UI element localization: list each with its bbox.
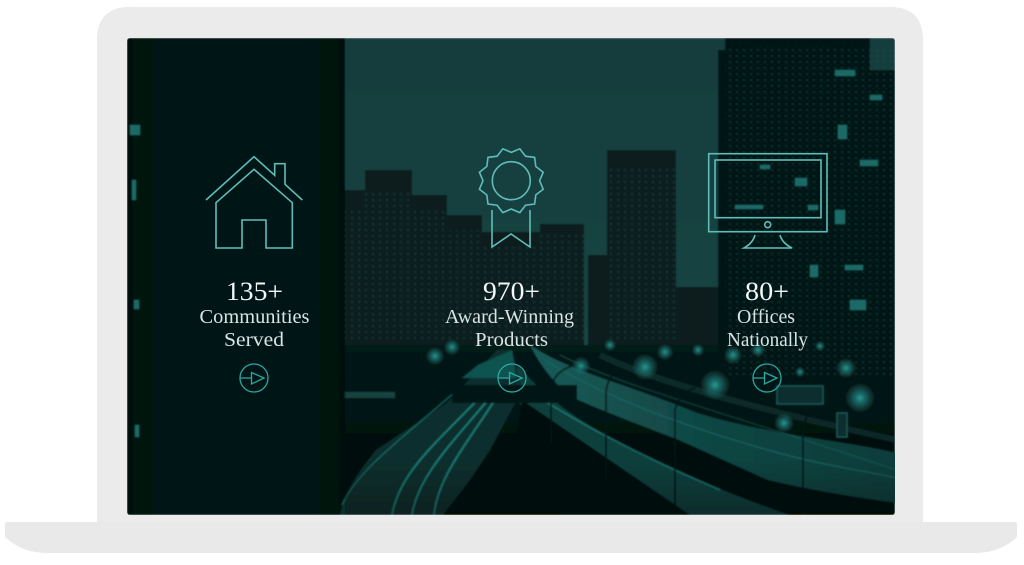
screen photo: city highway at night	[127, 38, 897, 515]
icon: award ribbon	[479, 149, 543, 247]
street lamps	[551, 366, 825, 515]
label: communities: Communities	[200, 306, 310, 328]
number: 970+: 970+	[483, 277, 540, 306]
icon: arrow button	[498, 364, 526, 392]
overpass and supports	[515, 400, 690, 515]
icon: monitor	[709, 154, 827, 248]
icon: arrow button	[753, 364, 781, 392]
label: offices: Offices	[737, 306, 795, 328]
label: nationally: Nationally	[727, 329, 808, 351]
stat: communities served	[200, 157, 310, 392]
street light glows	[426, 339, 875, 433]
stat: offices nationally	[709, 154, 827, 392]
icon: arrow button	[240, 364, 268, 392]
number: 135+: 135+	[226, 277, 283, 306]
right highway	[530, 345, 897, 503]
number: 80+: 80+	[745, 277, 789, 306]
road signs	[777, 386, 823, 404]
left road	[340, 350, 522, 515]
label: award-winning: Award-Winning	[445, 306, 574, 328]
label: served: Served	[224, 329, 284, 351]
mid-distance skyline	[345, 150, 720, 362]
scattered lit windows	[130, 70, 882, 437]
icon: house	[206, 157, 302, 248]
stat: award-winning products	[445, 149, 574, 392]
label: products: Products	[475, 329, 548, 351]
